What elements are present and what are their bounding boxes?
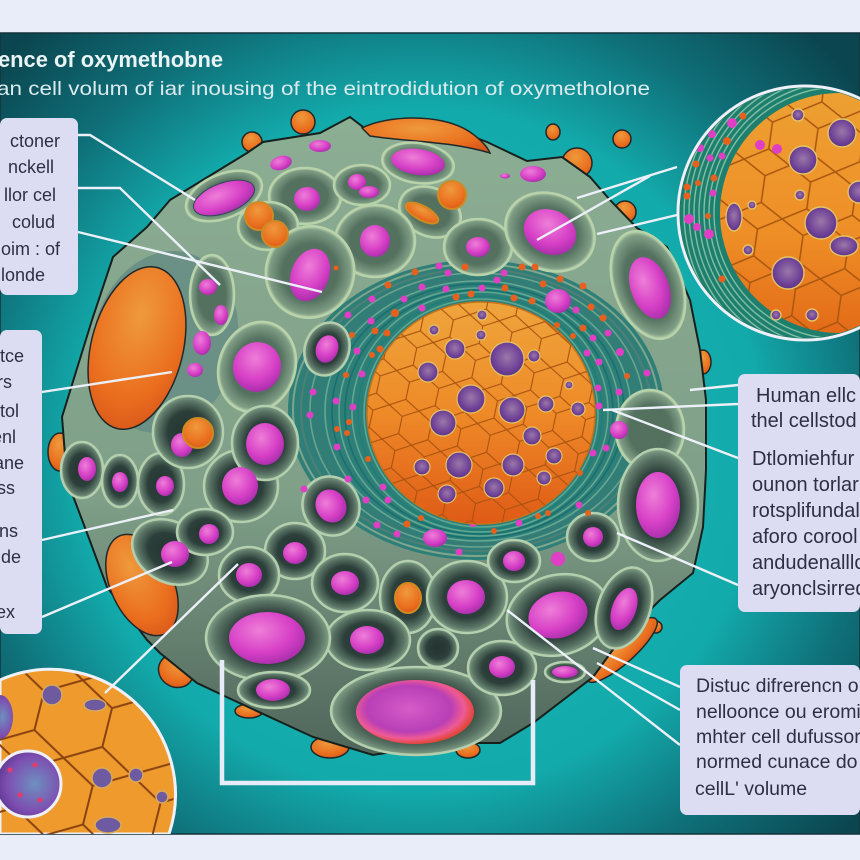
- subtitle: an cell volum of iar inousing of the eintrodidution of oxymetholone: [0, 78, 650, 100]
- cavity around the large vacuole: [95, 251, 238, 432]
- inset circle: bottom left magnified cell: [0, 669, 180, 835]
- callout: right: thel cellstod: [751, 410, 857, 432]
- callout: middle left: tol: [0, 401, 19, 421]
- cell body: [62, 117, 706, 755]
- callout: upper left: [0, 118, 78, 295]
- inset circle: top right magnified nucleus: [676, 84, 860, 342]
- concentric endoplasmic rings: [288, 260, 664, 560]
- callout: upper left: londe: [1, 265, 45, 285]
- callout: lower right: normed cunace do: [696, 751, 858, 773]
- callout: right: Human ellc: [756, 385, 856, 407]
- orange organelles in the wells: [183, 181, 466, 613]
- bracket: [222, 660, 533, 783]
- callout: middle left: de: [1, 547, 21, 567]
- central nucleus: [366, 301, 596, 525]
- callout: middle left: tce: [0, 346, 24, 366]
- cell wells lower: [61, 316, 698, 755]
- callout: right: ounon torlar: [752, 474, 859, 496]
- callout: middle left: [0, 330, 42, 634]
- callout: lower right: mhter cell dufussor: [696, 726, 860, 748]
- callout: upper left: nckell: [8, 157, 54, 177]
- leader lines: [42, 135, 738, 745]
- callout: upper left: oim : of: [1, 239, 61, 259]
- outer organelles behind the cell: [48, 110, 711, 758]
- scattered orange vesicles: [334, 264, 630, 534]
- cell wells upper: [179, 138, 699, 470]
- scattered magenta vesicles: [300, 262, 650, 566]
- callout: lower right: Distuc difrerencn o: [696, 675, 859, 697]
- callout: upper left: colud: [12, 212, 55, 232]
- nuclei of the cell wells: [78, 140, 680, 701]
- title: ence of oxymethobne: [0, 47, 223, 72]
- large lower nucleus: [356, 680, 474, 744]
- large orange vacuoles: [72, 118, 490, 647]
- callout: right: aforo corool: [752, 526, 858, 548]
- callout: right: rotsplifundal: [752, 500, 860, 522]
- large cell: [48, 110, 711, 758]
- callout: lower right: nelloonce ou eromi: [696, 701, 860, 723]
- callout: right: Dtlomiehfur: [752, 448, 855, 470]
- callout: lower right: [680, 665, 860, 815]
- callout: upper left: llor cel: [4, 185, 56, 205]
- callout: lower right: cellL' volume: [695, 778, 807, 800]
- callout: upper left: ctoner: [10, 131, 60, 151]
- callout: right: [738, 374, 860, 612]
